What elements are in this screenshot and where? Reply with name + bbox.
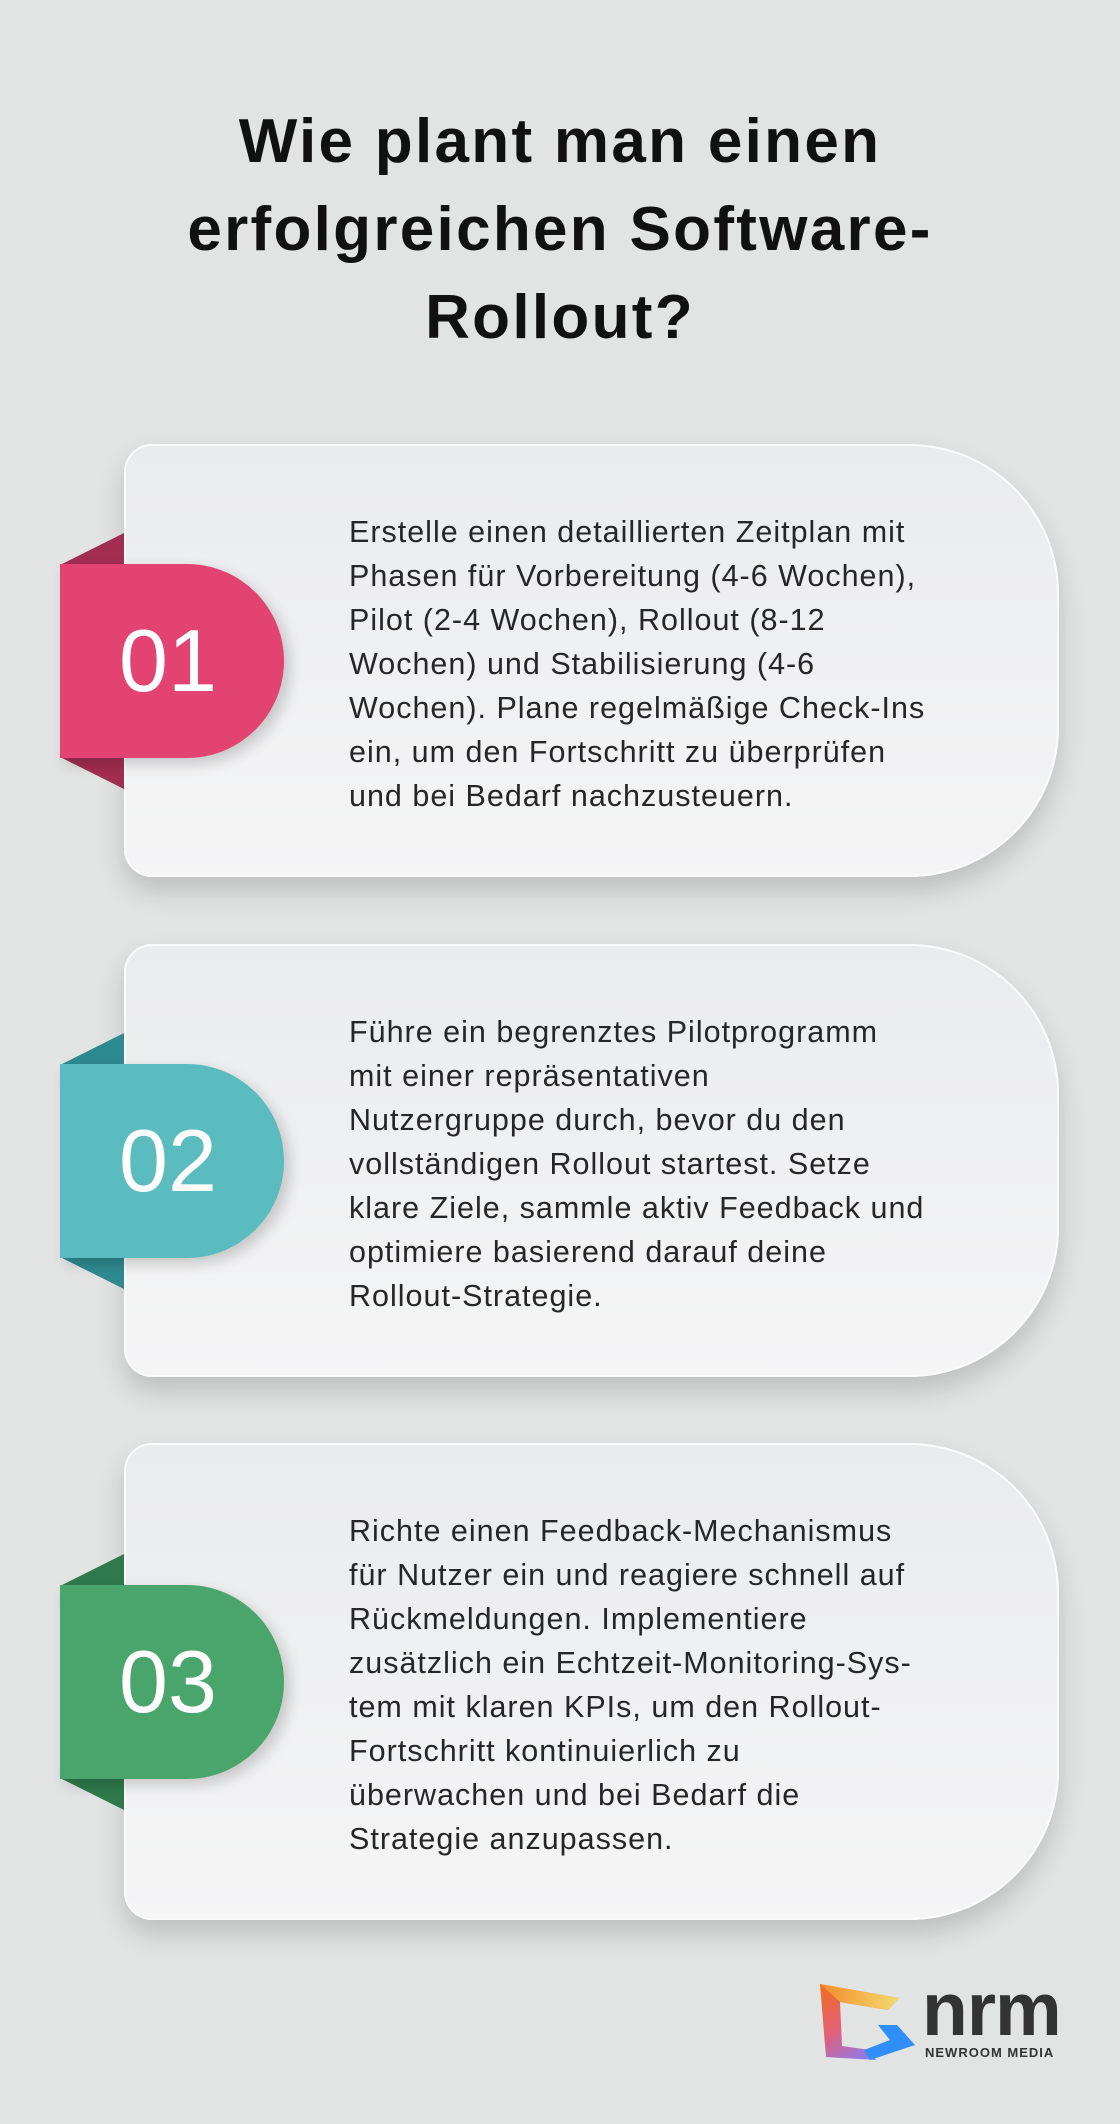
text 01 (349, 515, 925, 813)
text 01: Erstelle einen detaillierten Zeitplan mit (349, 515, 905, 549)
fold top 02 (62, 1033, 124, 1064)
fold top 03 (62, 1554, 124, 1585)
panel: step 01 (60, 444, 1068, 900)
badge 01: 01 (119, 611, 217, 710)
text 02: optimiere basierend darauf deine (349, 1235, 827, 1269)
text 01: Wochen). Plane regelmäßige Check-Ins (349, 691, 925, 725)
text 03: tem mit klaren KPIs, um den Rollout- (349, 1690, 882, 1724)
badge 03: 03 (119, 1632, 217, 1731)
title (187, 107, 933, 352)
fold bottom 01 (62, 758, 124, 789)
text 02: klare Ziele, sammle aktiv Feedback und (349, 1191, 924, 1225)
text 03: überwachen und bei Bedarf die (349, 1778, 800, 1812)
badge 01 (60, 564, 284, 758)
text 01: und bei Bedarf nachzusteuern. (349, 779, 793, 813)
badge 03 (60, 1585, 284, 1779)
text 01: ein, um den Fortschritt zu überprüfen (349, 735, 886, 769)
panel: step 03 (60, 1443, 1068, 1943)
text 02: Rollout-Strategie. (349, 1279, 603, 1313)
text 03: Richte einen Feedback-Mechanismus (349, 1514, 892, 1548)
text 02 (349, 1015, 924, 1313)
text 03: Rückmeldungen. Implementiere (349, 1602, 808, 1636)
text 01: Phasen für Vorbereitung (4-6 Wochen), (349, 559, 916, 593)
fold bottom 03 (62, 1779, 124, 1810)
icon: logo mark (820, 1984, 915, 2060)
title: Wie plant man einen (239, 107, 881, 176)
badge 02: 02 (119, 1111, 217, 1210)
title: Rollout? (425, 283, 695, 352)
text 03: Fortschritt kontinuierlich zu (349, 1734, 741, 1768)
text 02: Nutzergruppe durch, bevor du den (349, 1103, 846, 1137)
panel: step 02 (60, 944, 1068, 1400)
title: erfolgreichen Software- (187, 195, 933, 264)
fold top 01 (62, 533, 124, 564)
text 03 (349, 1514, 912, 1856)
logo (820, 1967, 1061, 2060)
text 02: Führe ein begrenztes Pilotprogramm (349, 1015, 878, 1049)
text 03: für Nutzer ein und reagiere schnell auf (349, 1558, 905, 1592)
text 02: mit einer repräsentativen (349, 1059, 710, 1093)
text 01: Wochen) und Stabilisierung (4-6 (349, 647, 815, 681)
fold bottom 02 (62, 1258, 124, 1289)
logo: NEWROOM MEDIA (925, 2045, 1054, 2060)
text 02: vollständigen Rollout startest. Setze (349, 1147, 871, 1181)
badge 02 (60, 1064, 284, 1258)
text 03: Strategie anzupassen. (349, 1822, 674, 1856)
text 03: zusätzlich ein Echtzeit-Monitoring-Sys- (349, 1646, 912, 1680)
text 01: Pilot (2-4 Wochen), Rollout (8-12 (349, 603, 826, 637)
brand text: nrm (922, 1967, 1061, 2051)
